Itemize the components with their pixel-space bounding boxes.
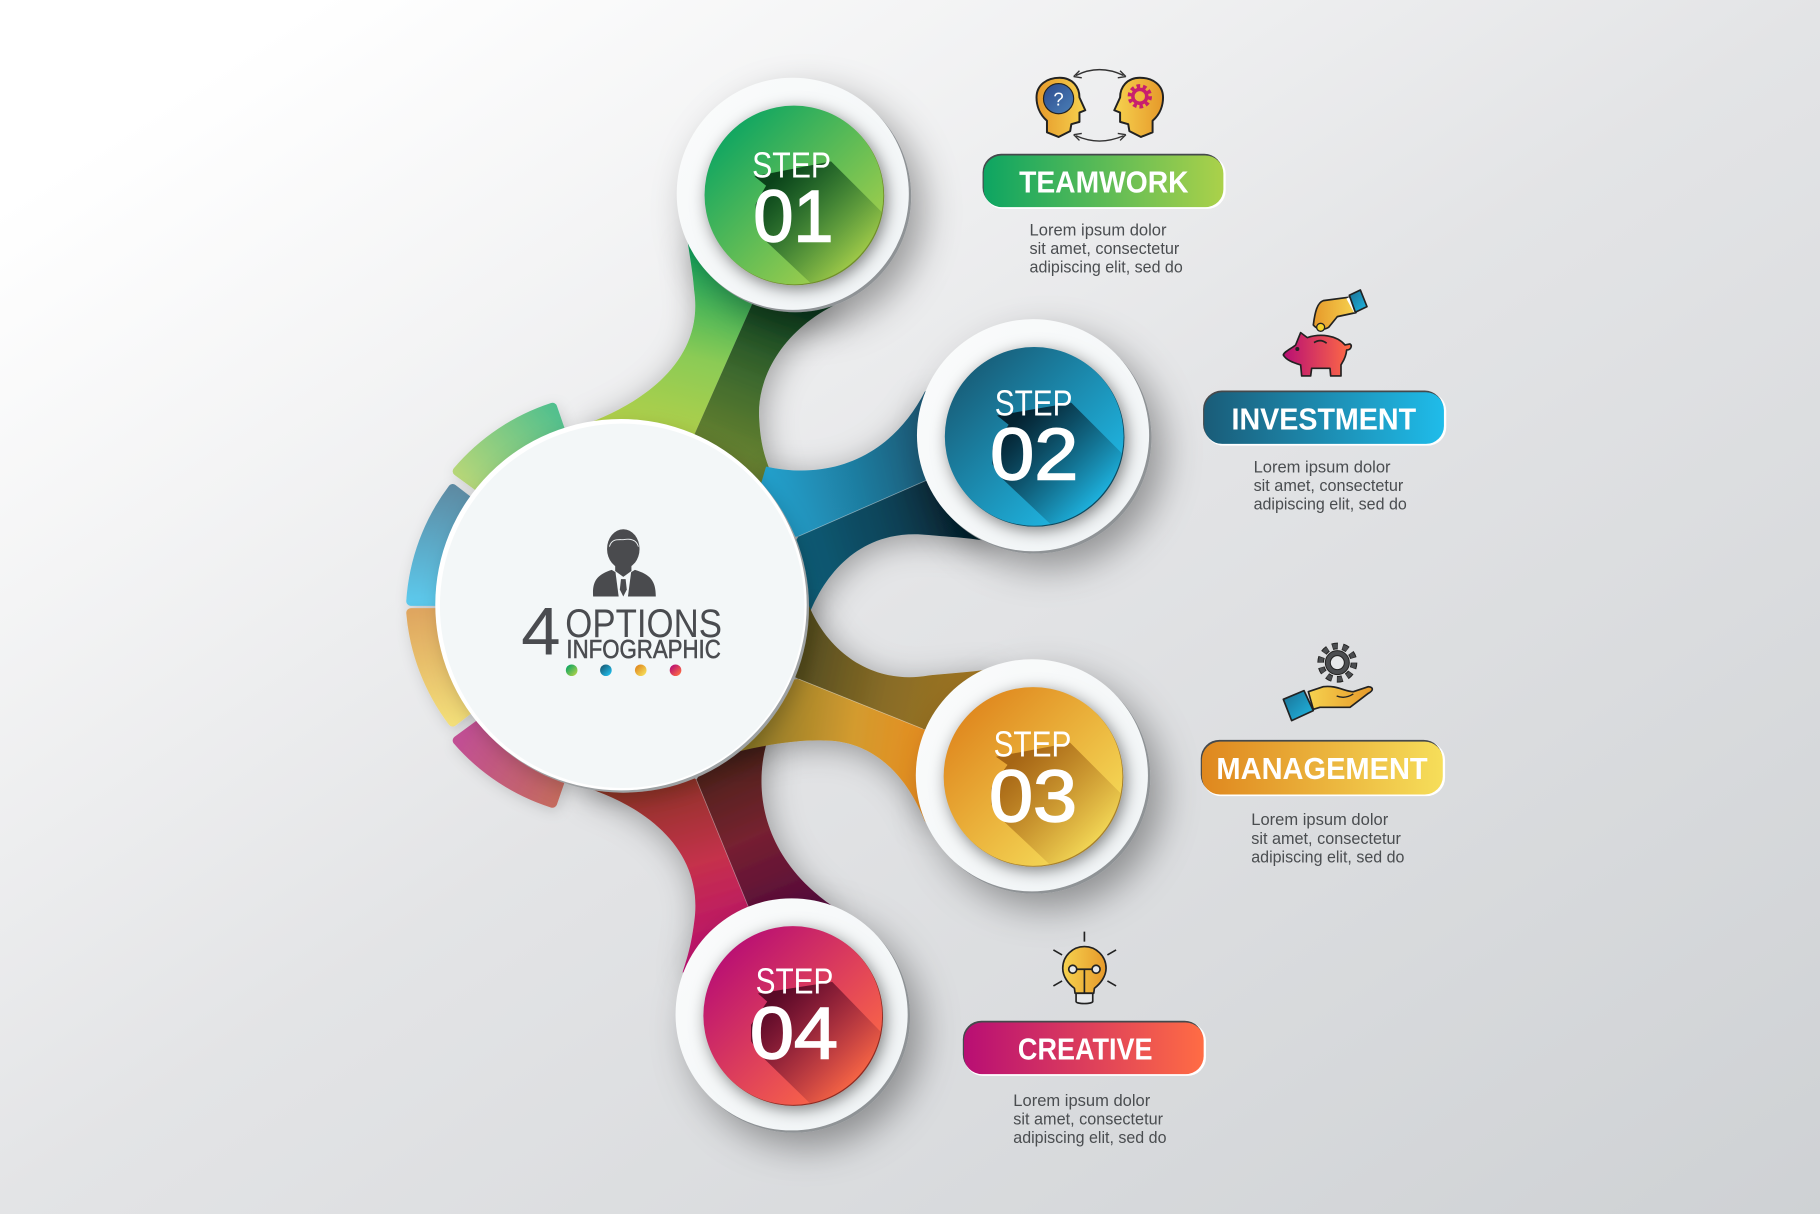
text: creative description: Lorem ipsum dolor bbox=[1013, 1091, 1151, 1110]
step 1 badge bbox=[677, 78, 911, 312]
step 3 label: STEP bbox=[994, 724, 1071, 765]
step 4 badge bbox=[676, 898, 910, 1133]
step 3 label: 03 bbox=[989, 757, 1077, 838]
icon: teamwork heads bbox=[1037, 70, 1163, 141]
text: investment description: Lorem ipsum dolor bbox=[1254, 457, 1391, 476]
step 3 label bbox=[989, 724, 1077, 838]
icon: light bulb bbox=[1053, 932, 1116, 1004]
pill: creative: CREATIVE bbox=[1018, 1034, 1153, 1067]
connector: step 4 bbox=[580, 696, 838, 973]
connectors bbox=[580, 238, 998, 973]
text: teamwork description bbox=[1030, 221, 1183, 277]
step 2 label: STEP bbox=[995, 383, 1072, 423]
text: management description bbox=[1251, 810, 1404, 866]
icon: piggy bank and hand bbox=[1283, 290, 1367, 376]
pill: management: MANAGEMENT bbox=[1216, 753, 1428, 786]
title: 4 options infographic: OPTIONS bbox=[565, 602, 722, 646]
pill: teamwork bbox=[983, 154, 1226, 209]
step 3 badge bbox=[916, 659, 1150, 894]
text: creative description: sit amet, consectetur bbox=[1013, 1110, 1163, 1129]
step 2 label bbox=[990, 383, 1078, 495]
arc: blue bbox=[411, 489, 478, 601]
pill: management bbox=[1201, 740, 1445, 796]
arc: pink bbox=[457, 718, 564, 803]
text: investment description: sit amet, consectetur bbox=[1254, 476, 1404, 495]
text: teamwork description: sit amet, consectetur bbox=[1030, 239, 1180, 258]
step 4 label bbox=[750, 960, 838, 1074]
title: 4 options infographic bbox=[521, 595, 722, 670]
step 4 label: STEP bbox=[756, 960, 833, 1001]
pill: teamwork: TEAMWORK bbox=[1019, 167, 1189, 200]
pill: creative bbox=[963, 1021, 1206, 1076]
connector: step 2 bbox=[743, 391, 998, 627]
connector: step 1 bbox=[580, 238, 842, 511]
icon: teamwork heads: ? bbox=[1053, 89, 1064, 110]
title: 4 options infographic: INFOGRAPHIC bbox=[566, 634, 721, 664]
text: management description: sit amet, consectetur bbox=[1251, 829, 1401, 848]
step 1 label: STEP bbox=[752, 145, 831, 186]
legend dots bbox=[566, 664, 681, 676]
step 1 label bbox=[752, 145, 833, 257]
text: management description: adipiscing elit, sed do bbox=[1251, 847, 1404, 866]
step 2 badge bbox=[917, 319, 1151, 554]
text: investment description: adipiscing elit, sed do bbox=[1254, 495, 1407, 514]
text: creative description: adipiscing elit, sed do bbox=[1013, 1128, 1167, 1147]
arc: orange bbox=[411, 613, 478, 722]
text: investment description bbox=[1254, 457, 1407, 514]
text: management description: Lorem ipsum dolor bbox=[1251, 810, 1389, 829]
pill: investment: INVESTMENT bbox=[1232, 403, 1417, 436]
text: teamwork description: adipiscing elit, sed do bbox=[1030, 258, 1183, 277]
arc: green bbox=[457, 407, 564, 493]
arc segments around centre bbox=[411, 407, 564, 803]
pill: investment bbox=[1203, 391, 1446, 446]
text: teamwork description: Lorem ipsum dolor bbox=[1030, 221, 1167, 240]
centre circle bbox=[435, 419, 809, 793]
text: creative description bbox=[1013, 1091, 1167, 1147]
step 1 label: 01 bbox=[753, 176, 833, 257]
title: 4 options infographic: 4 bbox=[521, 595, 561, 670]
icon: businessman bbox=[593, 529, 656, 597]
icon: hand with gear bbox=[1283, 646, 1372, 721]
step 4 label: 04 bbox=[750, 993, 838, 1074]
connector: step 3 bbox=[720, 606, 998, 822]
step 2 label: 02 bbox=[990, 414, 1078, 495]
